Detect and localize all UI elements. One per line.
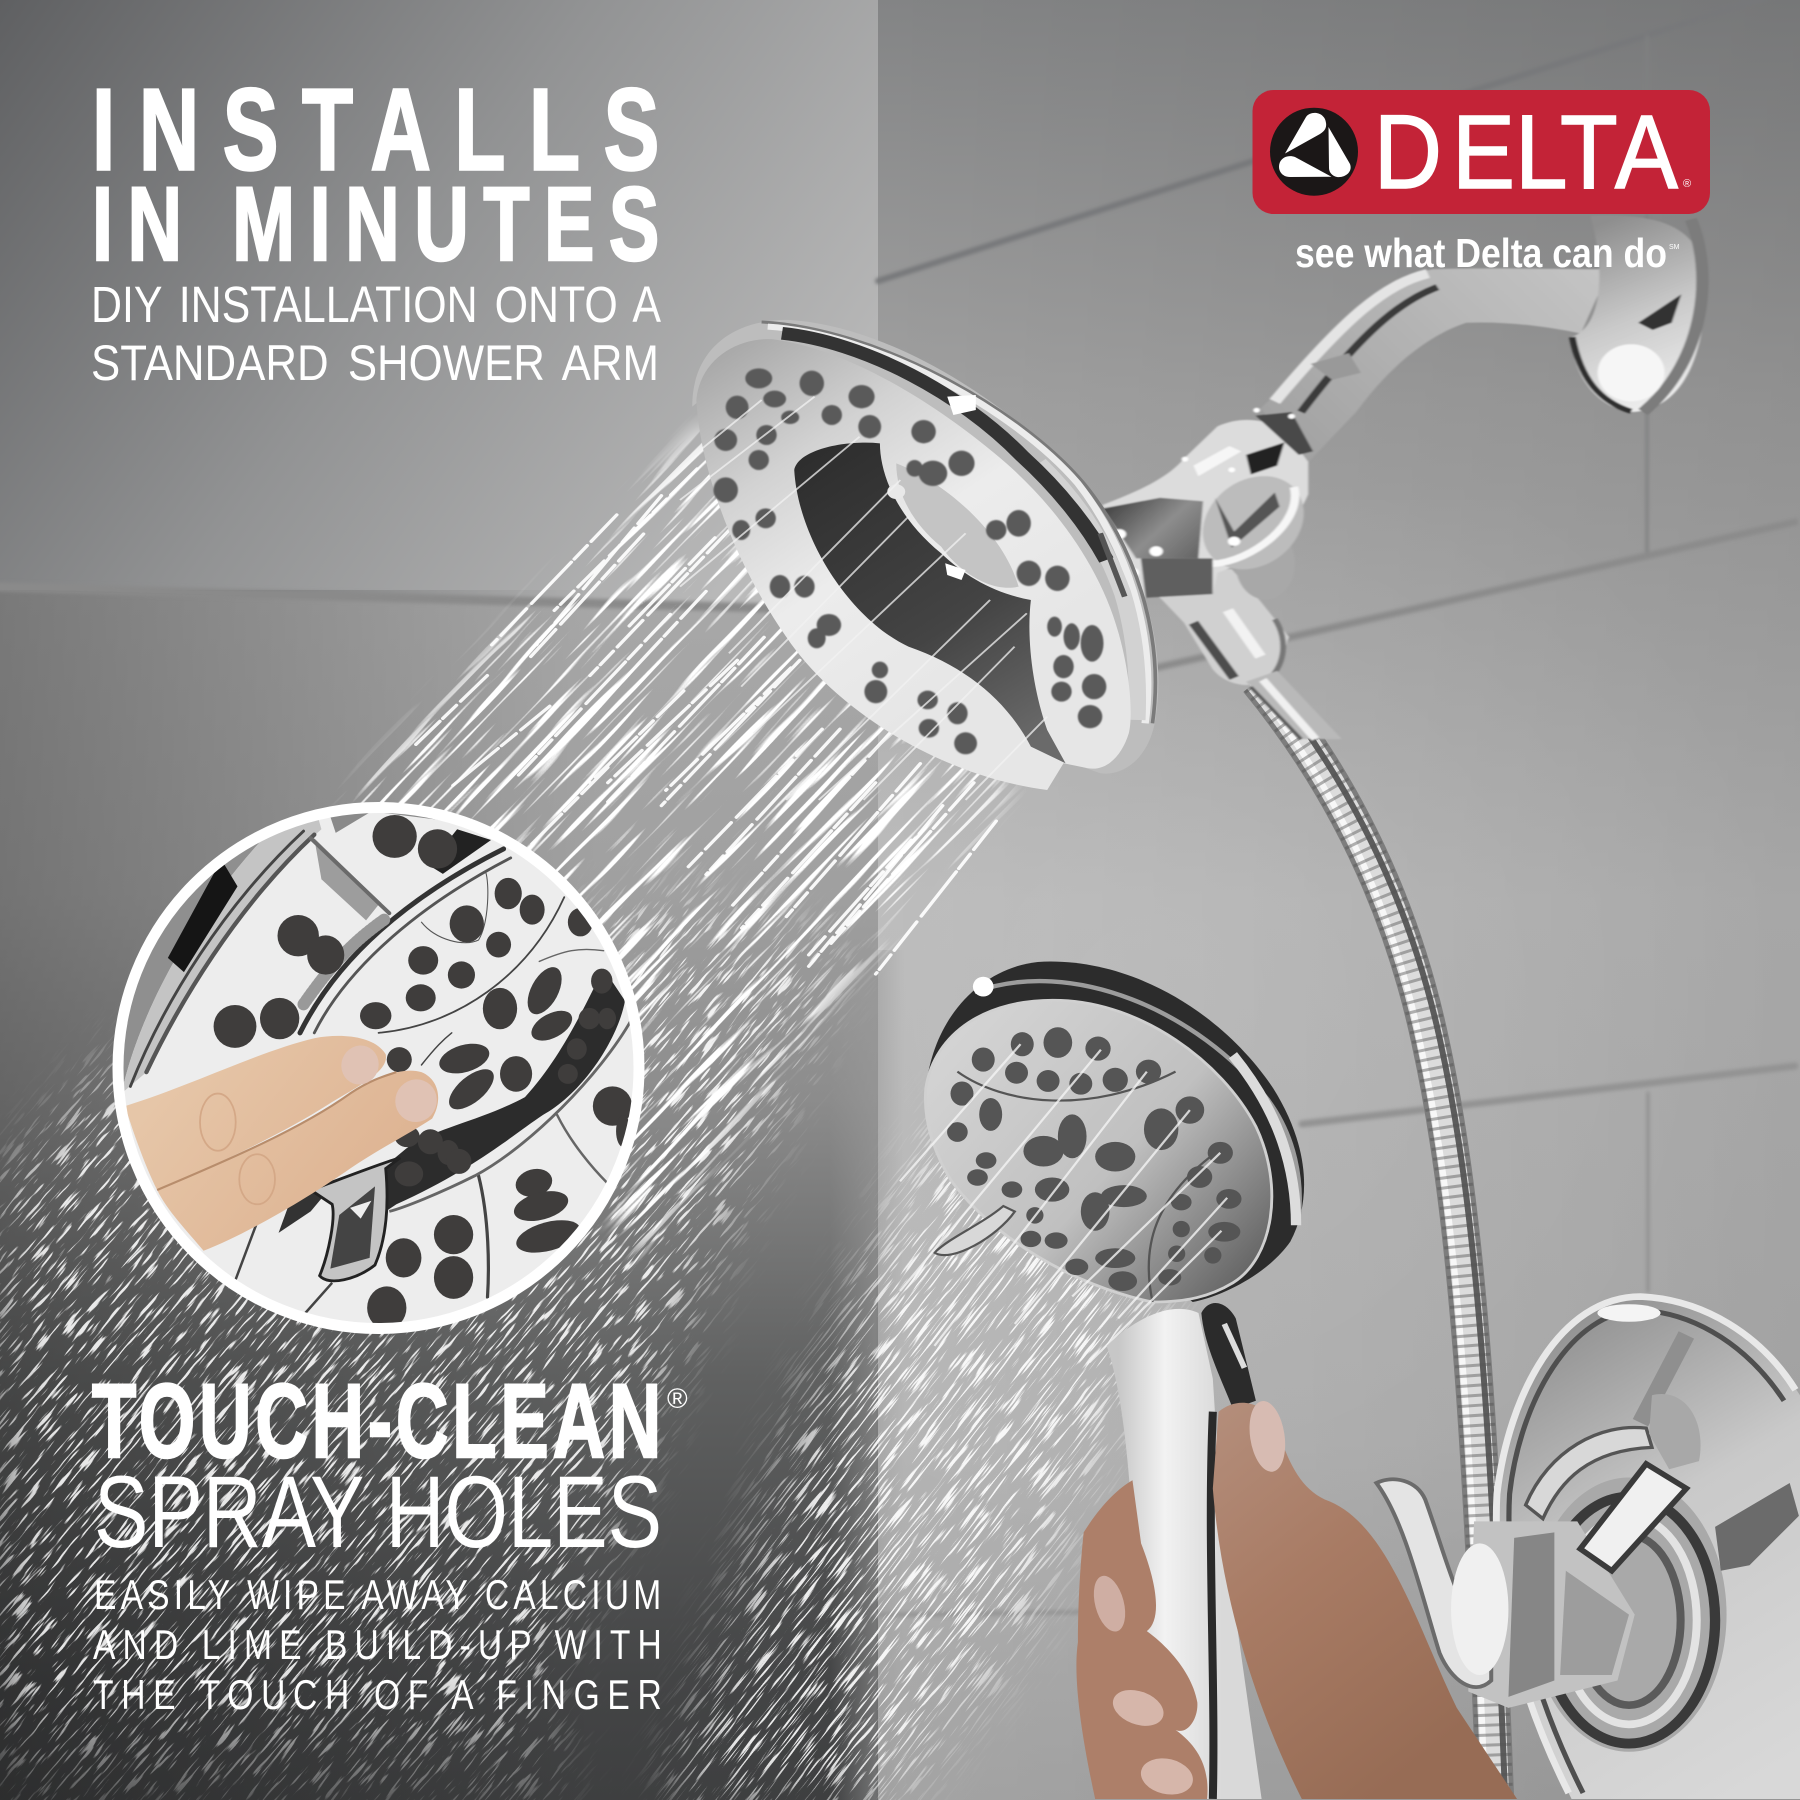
right wall bbox=[878, 0, 1800, 1800]
fingers bbox=[125, 1036, 386, 1190]
spray holes bbox=[713, 368, 1106, 754]
shower arm and mounting bracket bbox=[1103, 215, 1705, 739]
lower hose connector bbox=[1136, 569, 1289, 685]
registered mark: ® bbox=[1683, 178, 1691, 190]
hand shower spray selector bbox=[934, 1206, 1015, 1255]
red badge bbox=[1252, 90, 1710, 214]
service mark: SM bbox=[1669, 244, 1680, 251]
dark centre reflector bbox=[794, 443, 1066, 763]
spray face bbox=[696, 339, 1131, 790]
shower arm tube bbox=[1260, 268, 1610, 462]
water spray from overhead shower bbox=[416, 469, 996, 1103]
handle bbox=[1107, 1309, 1262, 1799]
DELTA wordmark: DELTA bbox=[1374, 94, 1678, 211]
feature subtitle: SPRAY HOLES bbox=[94, 1455, 662, 1569]
inset circle: finger wiping spray holes bbox=[100, 790, 660, 1350]
heading: touch-clean spray holes bbox=[92, 1363, 688, 1719]
inset white ring bbox=[118, 808, 639, 1328]
overhead 4-spray shower head bbox=[680, 320, 1158, 800]
hand shower face bbox=[925, 1000, 1272, 1302]
dark inner spray ring bbox=[387, 968, 625, 1210]
left wall upper tile bbox=[0, 0, 878, 615]
bracket body bbox=[1103, 420, 1308, 598]
thin water lines bbox=[900, 1044, 1227, 1362]
description line 3: THE TOUCH OF A FINGER bbox=[93, 1673, 662, 1719]
subtitle line 1: DIY INSTALLATION ONTO A bbox=[91, 276, 661, 333]
handheld shower, hand and valve bbox=[900, 962, 1800, 1800]
rim highlight bbox=[947, 395, 976, 415]
long streak texture bbox=[499, 1100, 501, 1103]
heading: installs in minutes bbox=[91, 66, 661, 391]
hand bbox=[1076, 1399, 1517, 1800]
valve lever hook bbox=[1376, 1479, 1491, 1687]
wall escutcheon bbox=[1571, 215, 1705, 412]
description line 1: EASILY WIPE AWAY CALCIUM bbox=[94, 1573, 661, 1619]
title line 2: IN MINUTES bbox=[92, 166, 659, 283]
subtitle line 2: STANDARD SHOWER ARM bbox=[91, 335, 659, 391]
hand shower rim bbox=[926, 962, 1304, 1302]
inset photo bbox=[124, 813, 634, 1323]
Delta triangle mark bbox=[1270, 108, 1358, 196]
short droplets, lower left bbox=[499, 1100, 502, 1103]
inset spray holes bbox=[214, 815, 632, 1329]
chrome rim bbox=[692, 320, 1158, 774]
feature title: TOUCH-CLEAN bbox=[92, 1363, 661, 1480]
registered mark: ® bbox=[667, 1383, 688, 1414]
thin water lines over face bbox=[680, 397, 1047, 800]
centre opening bbox=[896, 463, 1019, 588]
valve body bbox=[1531, 1478, 1727, 1752]
tagline: see what Delta can do bbox=[1295, 230, 1667, 276]
description line 2: AND LIME BUILD-UP WITH bbox=[93, 1623, 662, 1669]
water spray from hand shower bbox=[499, 1100, 502, 1103]
valve trim plate bbox=[1376, 1297, 1800, 1799]
left wall lower tile bbox=[0, 590, 878, 1800]
title line 1: INSTALLS bbox=[92, 66, 659, 195]
bright streaks bbox=[416, 469, 996, 974]
Delta logo bbox=[1252, 90, 1710, 276]
hose bbox=[1250, 680, 1505, 1795]
hand shower holes bbox=[947, 1027, 1242, 1291]
inset spray selector lever bbox=[311, 1158, 400, 1281]
